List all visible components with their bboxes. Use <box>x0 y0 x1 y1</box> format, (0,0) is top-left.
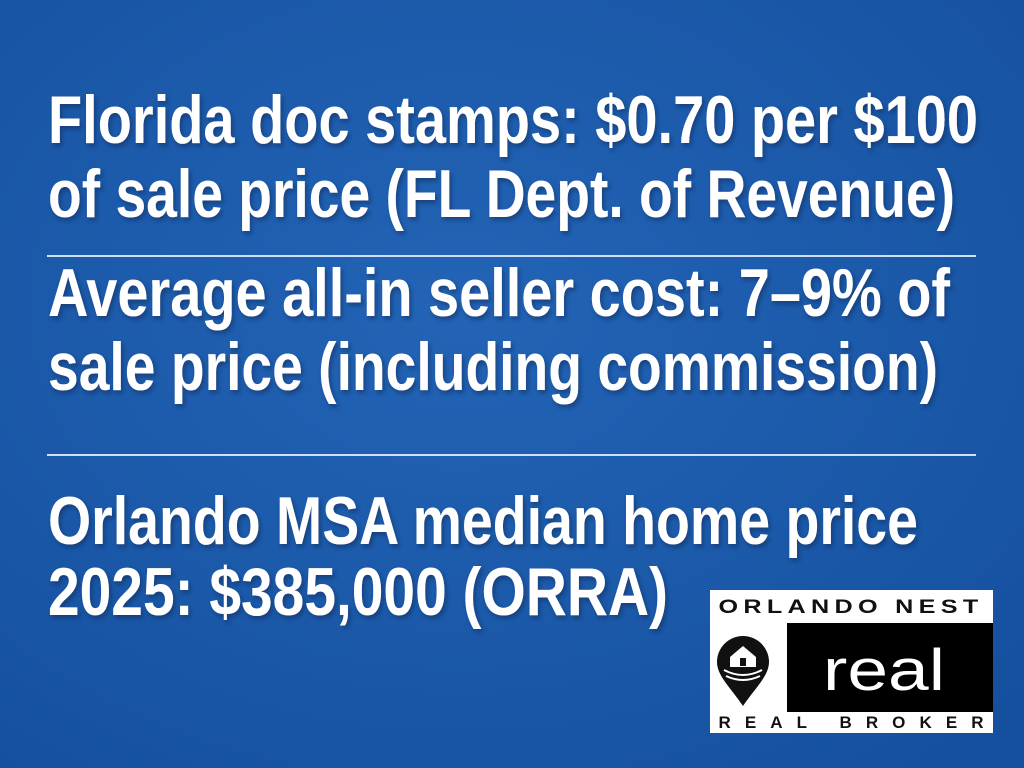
icon: house pin with nest <box>717 636 769 706</box>
fact 3: median price: 2025: $385,000 (ORRA) <box>48 554 668 630</box>
fact 2: seller cost <box>48 255 950 405</box>
fact 1: doc stamps <box>48 82 978 232</box>
logo: Orlando Nest Real Broker: real <box>823 638 945 703</box>
logo: Orlando Nest Real Broker: REAL BROKER <box>718 713 984 732</box>
fact 3: median price <box>48 483 918 630</box>
logo: Orlando Nest Real Broker <box>710 590 993 733</box>
logo: Orlando Nest Real Broker: ORLANDO NEST <box>718 597 984 618</box>
